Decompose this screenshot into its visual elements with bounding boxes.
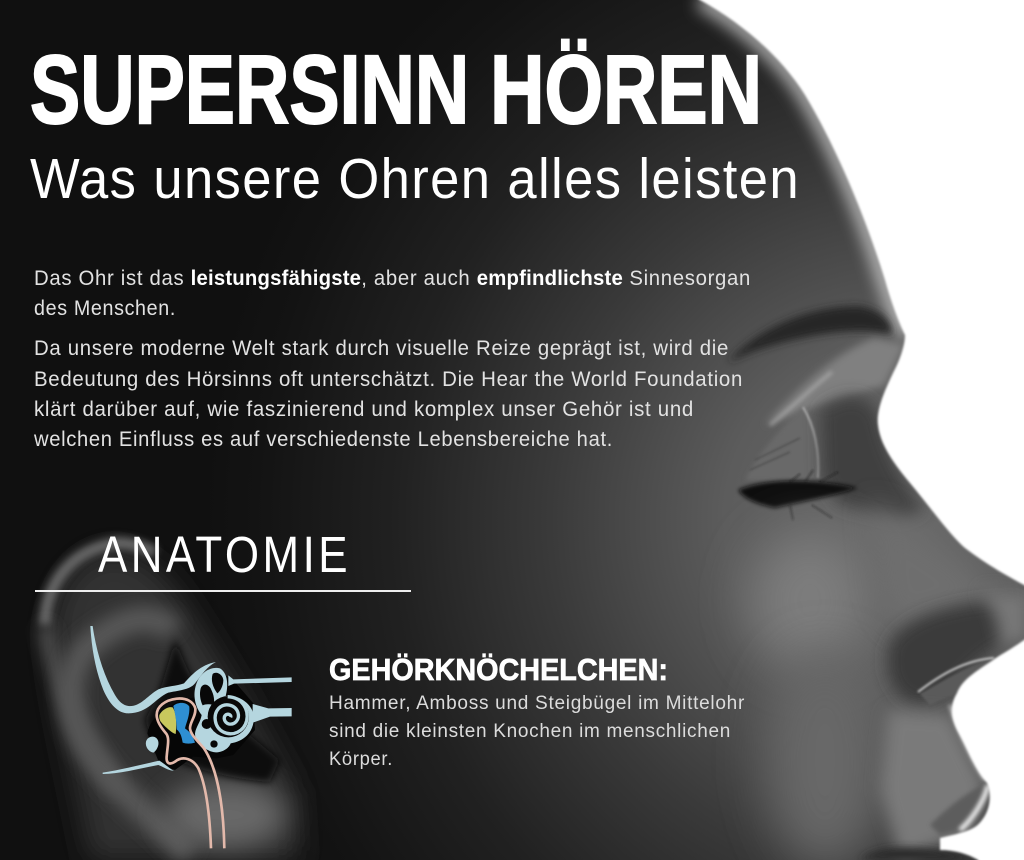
intro text: klärt darüber auf, wie faszinierend und komplex unser Gehör ist und	[34, 398, 694, 421]
intro text: Bedeutung des Hörsinns oft unterschätzt. Die Hear the World Foundation	[34, 368, 743, 391]
nostril shadow	[888, 600, 1024, 704]
round shape	[146, 737, 158, 753]
section heading: Anatomie: ANATOMIE	[98, 526, 351, 583]
ossicle: yellow	[159, 707, 176, 734]
callout: Gehörknöchelchen: GEHÖRKNÖCHELCHEN:	[329, 652, 668, 687]
callout: Gehörknöchelchen: sind die kleinsten Knochen im menschlichen	[329, 721, 731, 742]
intro text: Das Ohr ist das leistungsfähigste, aber auch empfindlichste Sinnesorgan	[34, 267, 751, 290]
forehead rim light	[700, 0, 905, 335]
intro text: Da unsere moderne Welt stark durch visuelle Reize geprägt ist, wird die	[34, 337, 729, 360]
subtitle: Was unsere Ohren alles leisten	[30, 147, 800, 211]
intro text: welchen Einfluss es auf verschiedenste Lebensbereiche hat.	[33, 428, 613, 451]
ear cavity	[145, 640, 280, 782]
icon: ear anatomy diagram	[90, 626, 292, 848]
callout: Gehörknöchelchen: Hammer, Amboss und Steigbügel im Mittelohr	[329, 693, 745, 714]
eyebrow	[728, 306, 892, 362]
intro text	[33, 267, 751, 451]
pink tube	[157, 699, 224, 848]
brow ridge	[765, 338, 905, 425]
ossicle: blue	[173, 703, 195, 744]
eyelashes	[738, 481, 858, 508]
title: SUPERSINN HÖREN	[30, 35, 762, 144]
callout: Gehörknöchelchen	[329, 652, 745, 770]
upper lip and mouth	[880, 710, 985, 860]
callout: Gehörknöchelchen: Körper.	[329, 749, 393, 770]
cheek light	[750, 530, 870, 670]
lower wall	[103, 761, 174, 774]
inner ear	[194, 668, 254, 752]
black surround	[147, 670, 255, 770]
intro text: des Menschen.	[34, 297, 176, 320]
ear shading	[50, 550, 300, 860]
ear canal wall	[90, 626, 216, 713]
eyelid	[748, 417, 812, 479]
